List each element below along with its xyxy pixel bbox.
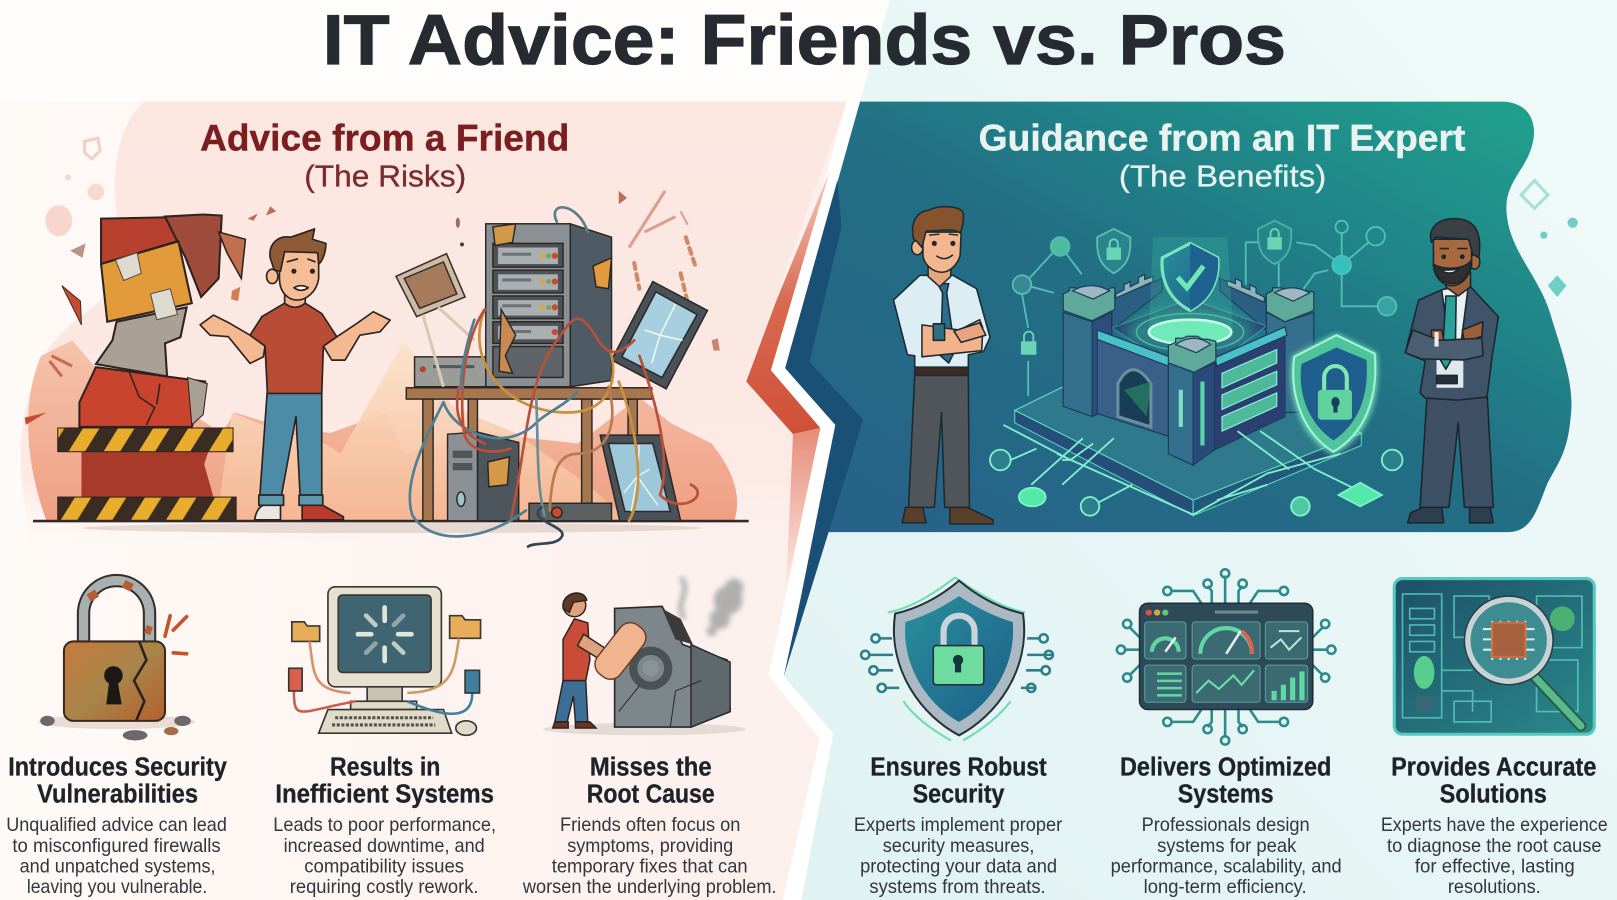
divider: white stripes between the two sides xyxy=(768,101,860,900)
background: friend side xyxy=(0,102,908,900)
text: misses the root cause: symptoms, providing xyxy=(567,836,733,857)
icon: broken monitor xyxy=(396,254,474,387)
icon: security shield xyxy=(861,578,1053,740)
subheading: the risks: (The Risks) xyxy=(304,159,466,194)
text: misses the root cause: worsen the underlying problem. xyxy=(522,877,777,898)
heading: friend side xyxy=(200,117,569,194)
top shield with check xyxy=(1162,243,1218,310)
text: provides accurate solutions xyxy=(1381,754,1608,898)
background: expert side xyxy=(784,0,1617,900)
text: ensures robust security: protecting your data and xyxy=(860,856,1057,877)
icon: performance dashboard xyxy=(1117,569,1335,745)
text: introduces security vulnerabilities: to misconfigured firewalls xyxy=(12,836,221,857)
divider: red lightning stripe xyxy=(746,170,830,593)
hazard barrier: lower xyxy=(58,497,236,521)
text: ensures robust security: Experts implement proper xyxy=(854,815,1063,836)
hazard barrier: upper xyxy=(58,428,233,452)
text: misses the root cause: Friends often focus on xyxy=(560,815,740,836)
text: misses the root cause: Root Cause xyxy=(587,780,715,808)
text: results in inefficient systems: Results in xyxy=(330,754,440,782)
text: provides accurate solutions: for effective, lasting xyxy=(1415,856,1575,877)
text: delivers optimized systems: performance, scalability, and xyxy=(1111,856,1342,877)
text: results in inefficient systems xyxy=(273,754,496,898)
text: ensures robust security: systems from threats. xyxy=(869,877,1046,898)
glowing circuit traces xyxy=(990,425,1402,516)
text: introduces security vulnerabilities: Vulnerabilities xyxy=(37,780,198,808)
text: introduces security vulnerabilities: leaving you vulnerable. xyxy=(27,877,207,898)
smoke plumes xyxy=(681,578,744,636)
courtyard and glowing pad xyxy=(1112,237,1266,363)
fortress platform xyxy=(1015,387,1361,516)
text: ensures robust security xyxy=(854,754,1063,898)
figure: confused friend xyxy=(200,229,390,520)
text: results in inefficient systems: Inefficient Systems xyxy=(275,780,494,808)
text: ensures robust security: security measures, xyxy=(883,836,1034,857)
icon: cracked small tablet xyxy=(600,435,681,521)
text: delivers optimized systems: systems for peak xyxy=(1157,836,1297,857)
text: results in inefficient systems: Leads to poor performance, xyxy=(273,815,496,836)
icon: bandage on broken gear block xyxy=(543,578,746,735)
text: misses the root cause xyxy=(522,754,777,898)
icon: magnifier over circuit board xyxy=(1394,579,1594,734)
icon: rusty broken padlock xyxy=(38,581,195,740)
text: misses the root cause: Misses the xyxy=(590,754,712,782)
text: results in inefficient systems: requiring costly rework. xyxy=(290,877,478,898)
panel: friend illustration backdrop xyxy=(21,102,847,547)
title: IT Advice: Friends vs. Pros xyxy=(323,1,1286,79)
text: results in inefficient systems: increased downtime, and xyxy=(284,836,485,857)
icon: cracked tablet xyxy=(612,282,707,389)
heading: friend side: Advice from a Friend xyxy=(200,117,569,159)
illustration: digital fortress xyxy=(990,237,1402,516)
text: ensures robust security: Security xyxy=(913,780,1005,808)
heading: expert side: Guidance from an IT Expert xyxy=(979,117,1465,159)
illustration: tangled server rack and desk xyxy=(406,224,652,521)
towers and walls xyxy=(1063,286,1314,465)
figure: IT expert in suit xyxy=(1405,219,1498,523)
ground line xyxy=(33,520,749,533)
tangled cables xyxy=(410,207,698,547)
text: introduces security vulnerabilities: and unpatched systems, xyxy=(20,856,216,877)
back crenellated walls xyxy=(1112,274,1266,330)
text: delivers optimized systems: long-term efficiency. xyxy=(1144,877,1307,898)
illustration: crumbling firewall xyxy=(79,215,245,497)
text: introduces security vulnerabilities xyxy=(6,754,227,898)
subheading: the benefits: (The Benefits) xyxy=(1119,159,1326,194)
decorative accents: expert side xyxy=(1521,180,1578,297)
icon: small shields and lock xyxy=(1021,221,1291,355)
icon: large padlock shield xyxy=(1291,333,1378,455)
network nodes background xyxy=(1013,221,1396,396)
text: misses the root cause: temporary fixes that can xyxy=(552,856,748,877)
text: ensures robust security: Ensures Robust xyxy=(870,754,1047,782)
text: provides accurate solutions: to diagnose the root cause xyxy=(1387,836,1602,857)
text: provides accurate solutions: Provides Accurate xyxy=(1391,754,1596,782)
text: provides accurate solutions: Experts have the experience xyxy=(1381,815,1608,836)
text: delivers optimized systems: Systems xyxy=(1178,780,1274,808)
text: delivers optimized systems xyxy=(1111,754,1342,898)
text: delivers optimized systems: Delivers Optimized xyxy=(1120,754,1331,782)
text: introduces security vulnerabilities: Introduces Security xyxy=(8,754,227,782)
text: results in inefficient systems: compatibility issues xyxy=(304,856,464,877)
text: delivers optimized systems: Professionals design xyxy=(1142,815,1310,836)
icon: slow retro computer xyxy=(289,587,481,735)
text: introduces security vulnerabilities: Unqualified advice can lead xyxy=(6,815,227,836)
heading: expert side xyxy=(979,117,1465,194)
panel: expert illustration backdrop xyxy=(784,102,1571,677)
decorative debris: friend side xyxy=(25,138,720,425)
figure: IT expert in shirt xyxy=(893,207,993,524)
text: provides accurate solutions: Solutions xyxy=(1440,780,1547,808)
text: provides accurate solutions: resolutions. xyxy=(1448,877,1541,898)
